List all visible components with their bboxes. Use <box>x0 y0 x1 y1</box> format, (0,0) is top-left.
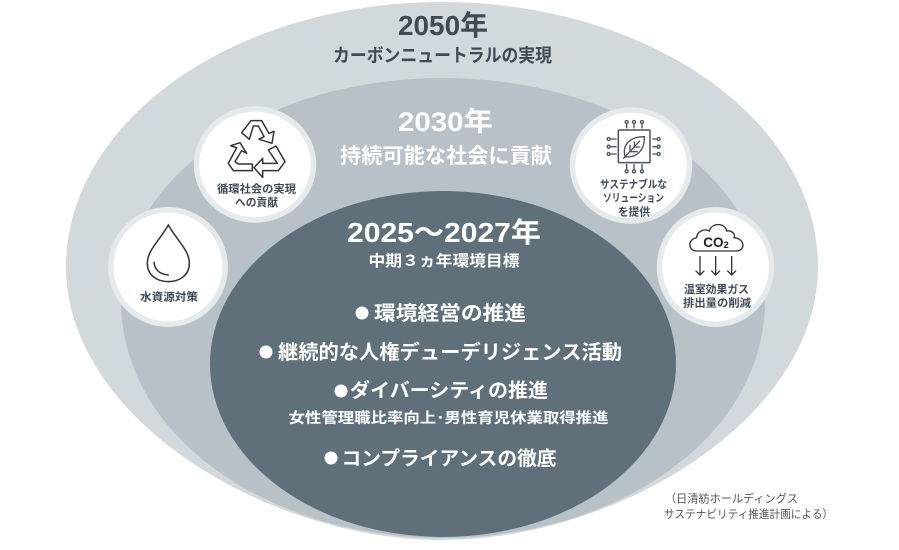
badge: greenhouse gas <box>660 210 772 324</box>
heading: 2025-2027 <box>347 217 541 270</box>
heading: 2050: 2050年 <box>398 10 488 41</box>
badge: water <box>111 210 225 324</box>
heading: 2050: カーボンニュートラルの実現 <box>333 45 552 66</box>
label: ソリューション <box>603 192 664 204</box>
label: への貢献 <box>235 195 278 209</box>
label: 温室効果ガス <box>684 282 749 296</box>
label <box>683 282 751 310</box>
heading: 2025-2027: 2025～2027年 <box>347 217 541 248</box>
icon: CO2 cloud with arrows: CO <box>703 235 723 250</box>
goal: diversity: ダイバーシティの推進 <box>350 379 548 402</box>
source note <box>664 492 833 521</box>
middle ellipse: 2030 <box>121 78 765 538</box>
icon: CO2 cloud with arrows: 2 <box>723 240 729 251</box>
icon: water drop <box>147 225 189 282</box>
goal: human rights due diligence: 継続的な人権デューデリジェンス活動 <box>278 340 622 364</box>
label: 水資源対策 <box>140 290 198 304</box>
heading: 2025-2027: 中期３ヵ年環境目標 <box>368 251 520 270</box>
goal: diversity detail: 女性管理職比率向上･男性育児休業取得推進 <box>288 409 609 427</box>
badge: sustainable solutions <box>572 110 690 221</box>
icon: chip with leaf <box>607 120 660 173</box>
heading: 2030: 2030年 <box>398 107 493 137</box>
heading: 2030: 持続可能な社会に貢献 <box>340 145 552 168</box>
goal list <box>260 302 622 470</box>
inner ellipse: 2025-2027 <box>210 191 676 537</box>
source note: サステナビリティ推進計画による） <box>664 507 833 521</box>
heading: 2050 <box>333 10 552 66</box>
label: サステナブルな <box>600 177 667 191</box>
badge: recycling <box>196 109 314 220</box>
icon: recycle arrows <box>228 121 285 177</box>
label <box>217 182 296 209</box>
source note: （日清紡ホールディングス <box>665 492 798 506</box>
label <box>600 177 667 218</box>
heading: 2030 <box>340 107 552 168</box>
goal: environmental management: 環境経営の推進 <box>374 302 526 325</box>
label: を提供 <box>618 204 650 218</box>
label: 循環社会の実現 <box>217 182 296 196</box>
goal: compliance: コンプライアンスの徹底 <box>342 448 556 470</box>
label: 排出量の削減 <box>683 296 751 310</box>
icon: CO2 cloud with arrows <box>690 224 743 275</box>
